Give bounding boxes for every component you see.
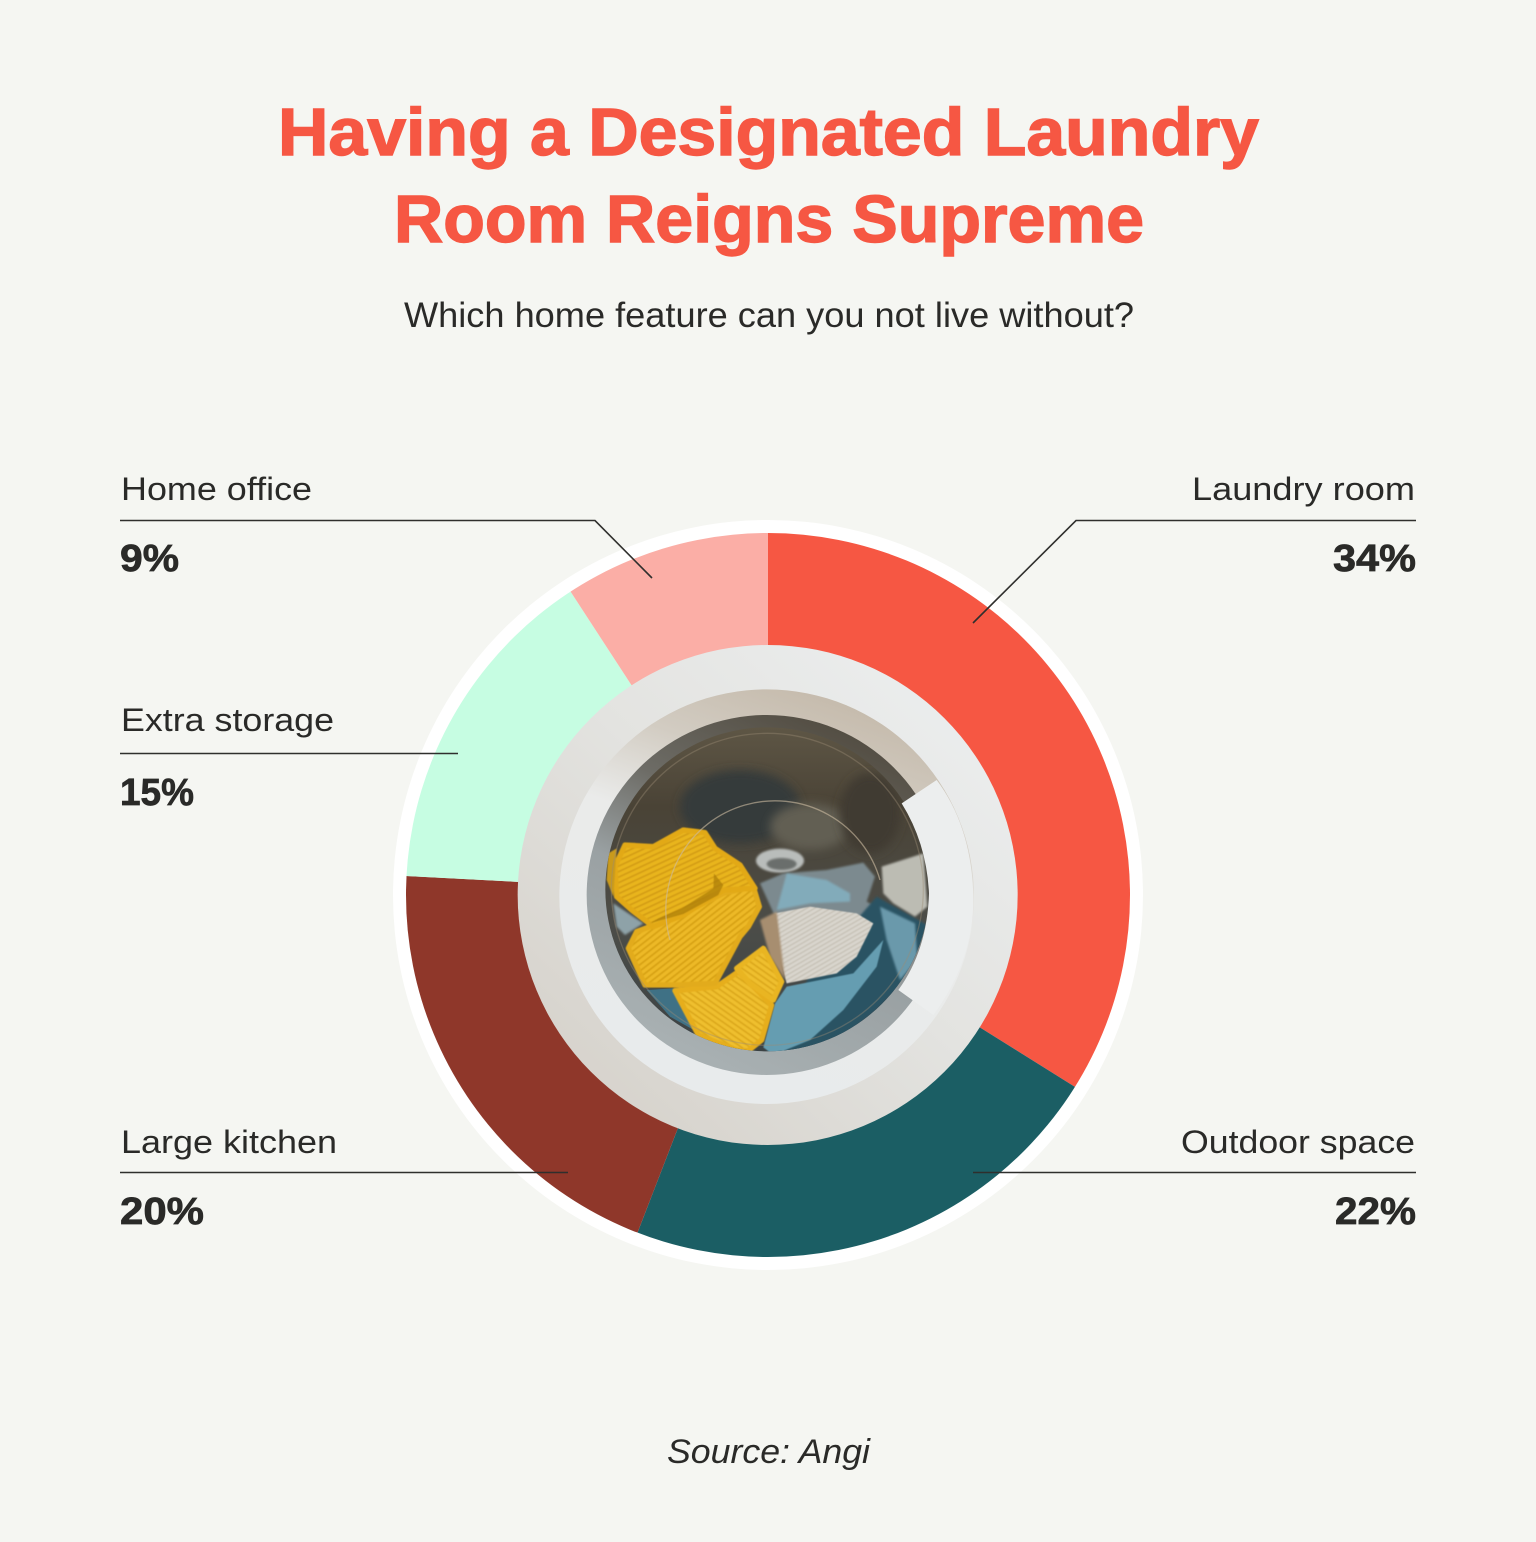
label: laundry room: 34% bbox=[1333, 538, 1416, 580]
title bbox=[278, 95, 1259, 257]
lower piece bbox=[675, 972, 772, 1051]
label: extra storage: Extra storage bbox=[121, 702, 334, 738]
slice: home office 9% bbox=[570, 533, 768, 686]
slice: laundry room 34% bbox=[768, 533, 1130, 1087]
label: laundry room: Laundry room bbox=[1192, 471, 1415, 507]
white lace cloth bbox=[882, 853, 927, 917]
glass window with laundry bbox=[603, 723, 933, 1057]
slice: large kitchen 20% bbox=[406, 876, 678, 1232]
washing machine door photo bbox=[518, 645, 1018, 1145]
outer door rim bbox=[518, 645, 1018, 1145]
reflection lower left bbox=[613, 903, 643, 935]
drum highlight bbox=[756, 849, 804, 873]
woven white cloth bbox=[775, 907, 873, 983]
label: outdoor space: 22% bbox=[1335, 1191, 1416, 1233]
lower denim bbox=[763, 940, 883, 1055]
label: large kitchen bbox=[120, 1124, 568, 1233]
yellow garment bbox=[607, 830, 782, 1051]
slice: extra storage 15% bbox=[406, 592, 632, 882]
blue cloth lower left bbox=[646, 988, 693, 1030]
right denim bbox=[880, 907, 917, 980]
tan seam bbox=[760, 912, 785, 980]
dark denim bbox=[777, 897, 930, 1057]
white ring bbox=[393, 520, 1143, 1270]
slice: outdoor space 22% bbox=[638, 1027, 1075, 1257]
main piece bbox=[628, 887, 759, 985]
title: Room Reigns Supreme bbox=[394, 182, 1144, 257]
source: Source: Angi bbox=[667, 1433, 872, 1471]
label: home office: Home office bbox=[121, 471, 312, 507]
door glass arc bbox=[666, 801, 880, 940]
label: large kitchen: 20% bbox=[120, 1191, 204, 1233]
label: extra storage: 15% bbox=[120, 772, 194, 814]
label: outdoor space: Outdoor space bbox=[1181, 1124, 1415, 1160]
label: home office: 9% bbox=[120, 538, 179, 580]
label: large kitchen: Large kitchen bbox=[121, 1124, 337, 1160]
inner door ring bbox=[559, 689, 974, 1104]
drum rim highlights bbox=[611, 733, 923, 1045]
grey cloth bbox=[759, 862, 876, 916]
label: laundry room bbox=[973, 471, 1416, 623]
slices bbox=[406, 533, 1130, 1257]
label: home office bbox=[120, 471, 652, 580]
left shade bbox=[607, 848, 617, 897]
infographic canvas bbox=[120, 106, 1416, 1470]
label: outdoor space bbox=[973, 1124, 1416, 1233]
right piece bbox=[737, 948, 782, 1000]
grey gasket bbox=[587, 715, 947, 1075]
label: extra storage bbox=[120, 702, 458, 814]
subtitle: Which home feature can you not live without? bbox=[404, 296, 1134, 335]
donut chart bbox=[393, 520, 1143, 1270]
fold shadow bbox=[650, 873, 723, 923]
upper denim bbox=[777, 873, 850, 910]
drum shadow bbox=[680, 770, 800, 843]
title: Having a Designated Laundry bbox=[278, 95, 1259, 170]
top sleeve bbox=[615, 830, 755, 927]
white inner flap bbox=[898, 780, 973, 1015]
